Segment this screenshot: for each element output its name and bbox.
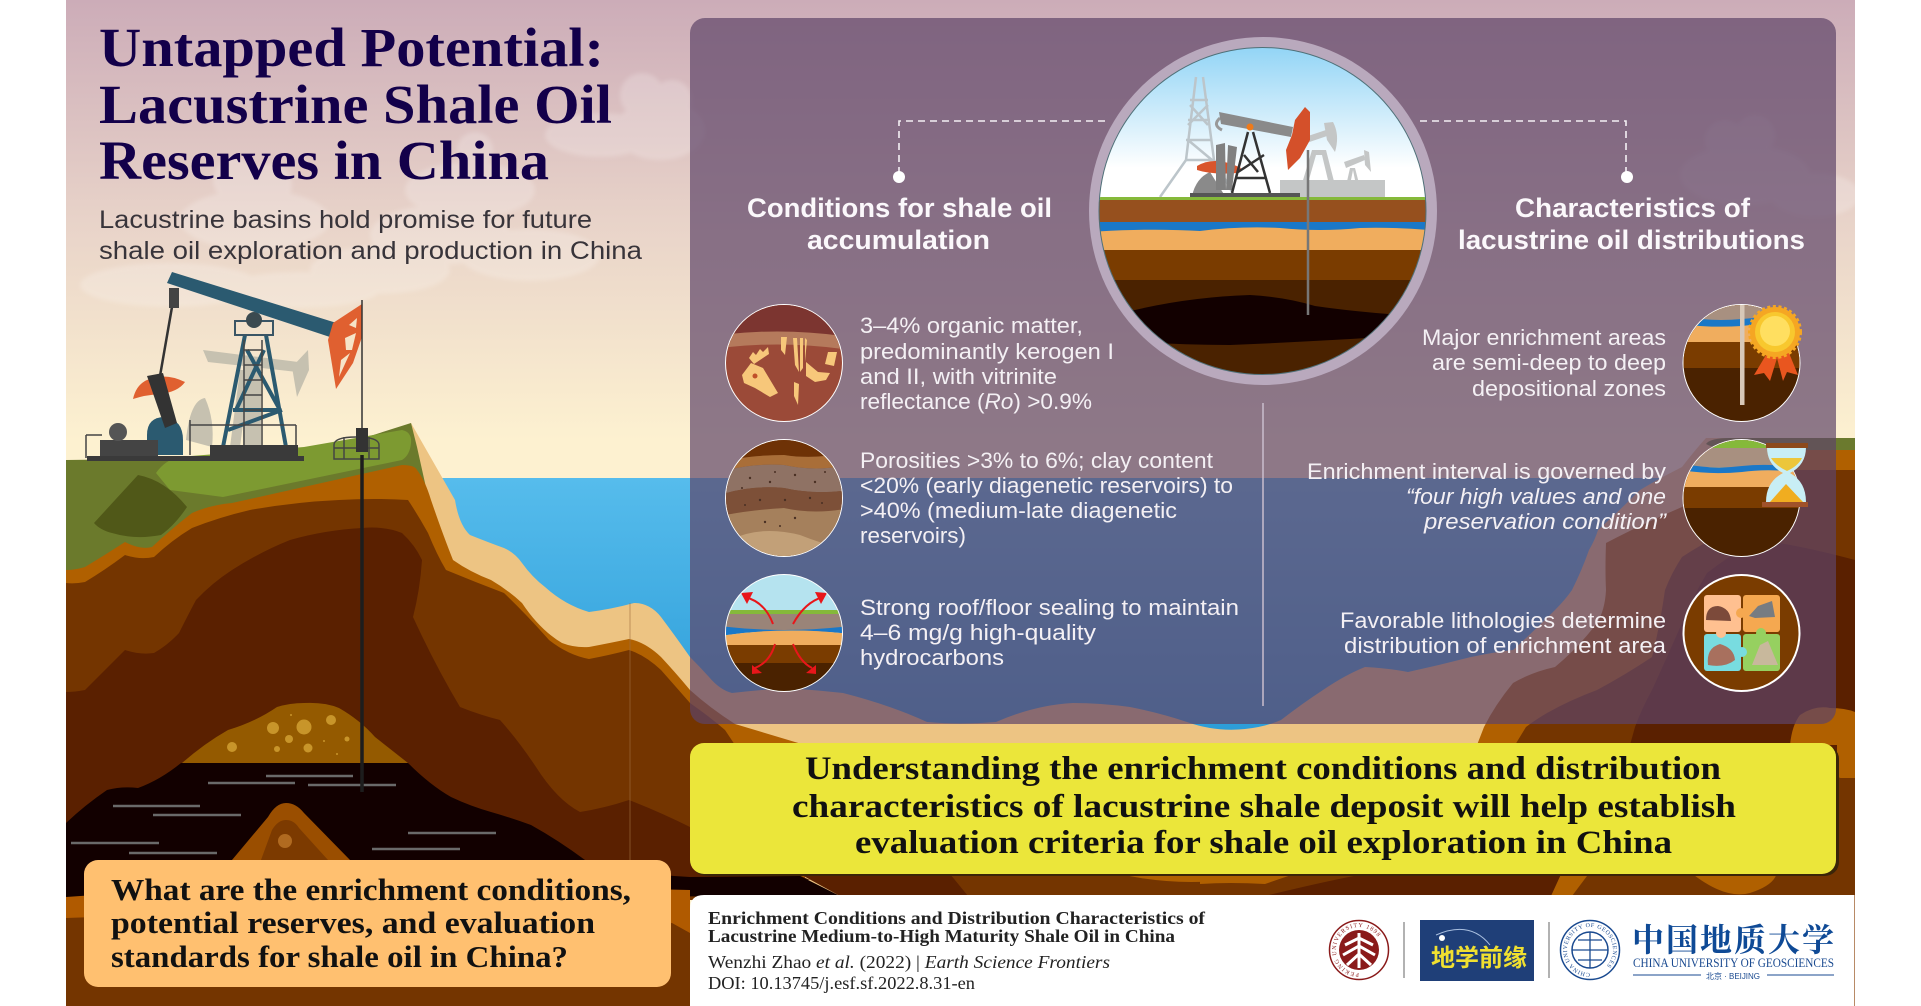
title: Reserves in China [99,130,549,191]
subtitle [99,206,642,265]
text: porosity: >40% (medium-late diagenetic [860,498,1177,523]
logo: China University of Geosciences: 中国地质大学 [1632,915,1834,961]
text: enrichment interval: “four high values and one [1406,484,1666,509]
text: organic matter: reflectance (Ro) >0.9% [860,389,1092,414]
text: lithologies: distribution of enrichment area [1344,633,1667,658]
logo: China University of Geosciences: CHINA UNIVERSITY OF GEOSCIENCES [1633,956,1834,970]
logo: China University of Geosciences: 北京 · BEIJING [1706,971,1760,981]
text: enrichment areas: depositional zones [1472,376,1666,401]
text: enrichment areas [1422,325,1666,401]
icon: strata with medal [1680,300,1805,425]
yellow conclusion box: Understanding the enrichment conditions and distribution [805,751,1721,787]
text: sealing: 4–6 mg/g high-quality [860,620,1096,645]
translucent main panel [690,18,1836,724]
text: organic matter: and II, with vitrinite [860,364,1057,389]
right dashed connector [1420,121,1633,183]
heading: conditions: Conditions for shale oil [747,193,1052,223]
shale seams in oil layer [71,776,496,853]
yellow conclusion box: evaluation criteria for shale oil exploration in China [855,825,1672,861]
text: lithologies [1340,608,1667,658]
text: organic matter: 3–4% organic matter, [860,313,1083,338]
heading: conditions [747,193,1052,255]
text: porosity: Porosities >3% to 6%; clay content [860,448,1213,473]
orange question box: standards for shale oil in China? [111,939,568,974]
footer with citation and logos [690,895,1855,1006]
footer with citation and logos: Lacustrine Medium-to-High Maturity Shale Oil in China [708,926,1175,946]
text: organic matter [860,313,1114,414]
text: organic matter: predominantly kerogen I [860,339,1114,364]
logo: China University of Geosciences [1560,915,1834,981]
icon: strata with hourglass [1680,435,1808,560]
icon: fossil [725,304,843,422]
heading: conditions: accumulation [807,225,990,255]
logo: China University of Geosciences: CHINA UNIVERSITY OF GEOSCIENCES [1563,923,1617,977]
text: lithologies: Favorable lithologies determine [1340,608,1666,633]
heading: characteristics: Characteristics of [1515,193,1751,223]
orange question box: What are the enrichment conditions, [111,872,631,907]
well pipe [360,455,364,792]
icon: porous strata [725,439,843,557]
orange question box [84,860,671,987]
text: porosity: <20% (early diagenetic reservoirs) to [860,473,1233,498]
heading: characteristics: lacustrine oil distributions [1458,225,1805,255]
logo: Earth Science Frontiers [1420,920,1534,981]
logo: Peking University seal: PEKING UNIVERSITY 1898 [1332,923,1380,977]
yellow conclusion box: characteristics of lacustrine shale deposit will help establish [792,789,1736,825]
subtitle: Lacustrine basins hold promise for future [99,206,592,234]
subtitle: shale oil exploration and production in China [99,237,642,265]
pump jack on the cliff [86,272,379,461]
text: enrichment interval: preservation condition” [1423,509,1668,534]
text: enrichment areas: are semi-deep to deep [1432,350,1666,375]
central circle illustration: pump jack above strata [1089,37,1440,385]
text: porosity [860,448,1233,548]
text: sealing: Strong roof/floor sealing to maintain [860,595,1239,620]
footer with citation and logos: Wenzhi Zhao et al. (2022) | Earth Science Frontiers [708,952,1110,972]
title: Lacustrine Shale Oil [99,74,612,135]
yellow conclusion box [690,743,1839,876]
footer with citation and logos: DOI: 10.13745/j.esf.sf.2022.8.31-en [708,973,975,993]
title [99,17,612,191]
icon: rock puzzle [1682,574,1800,692]
orange question box: potential reserves, and evaluation [111,905,595,940]
heading: characteristics [1458,193,1805,255]
text: enrichment interval: Enrichment interval is governed by [1307,459,1666,484]
centre divider [1262,403,1264,706]
text: sealing: hydrocarbons [860,645,1004,670]
logo: Earth Science Frontiers: 地学前缘 [1431,938,1527,973]
text: porosity: reservoirs) [860,523,966,548]
gas dome with bubbles [182,703,408,763]
text: enrichment interval [1307,459,1668,534]
title: Untapped Potential: [99,17,604,78]
text: enrichment areas: Major enrichment areas [1422,325,1666,350]
left dashed connector [893,121,1105,183]
logo separators [1404,922,1549,978]
icon: roof and floor sealing [725,574,843,692]
footer with citation and logos: Enrichment Conditions and Distribution Characteristics of [708,908,1205,928]
text: sealing [860,595,1239,670]
